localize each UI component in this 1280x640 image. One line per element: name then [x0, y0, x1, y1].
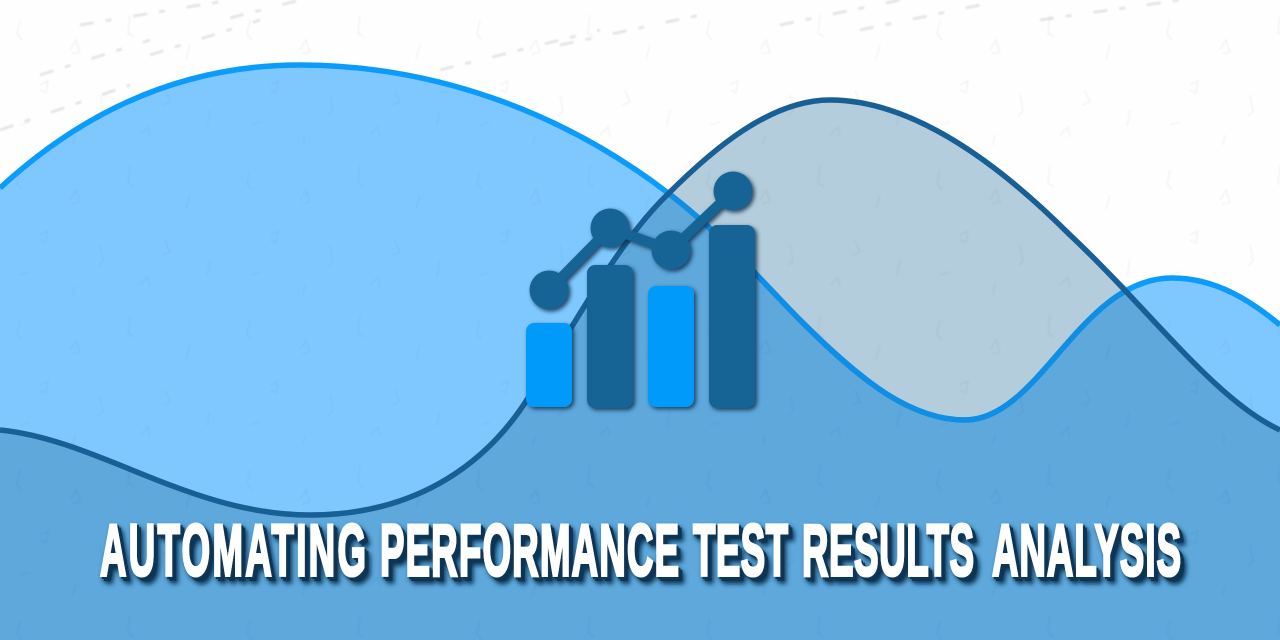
title: RESULTS: [802, 511, 974, 592]
wave: dark line: [0, 100, 1280, 515]
wave: grey area fill above light wave: [668, 100, 1128, 420]
wave: light line: [0, 65, 1280, 420]
title: PERFORMANCE: [380, 511, 679, 592]
trend points: [530, 172, 752, 310]
bars: [526, 225, 755, 408]
title: [100, 511, 1181, 592]
wave: light line inside overlap: [668, 193, 1172, 420]
wave: dark overlap fill: [0, 197, 1280, 640]
title: AUTOMATING: [100, 511, 366, 592]
trend line: [549, 191, 733, 290]
title: ANALYSIS: [992, 511, 1181, 592]
icon: bar chart with trend line: [526, 172, 755, 408]
title: TEST: [693, 511, 788, 592]
